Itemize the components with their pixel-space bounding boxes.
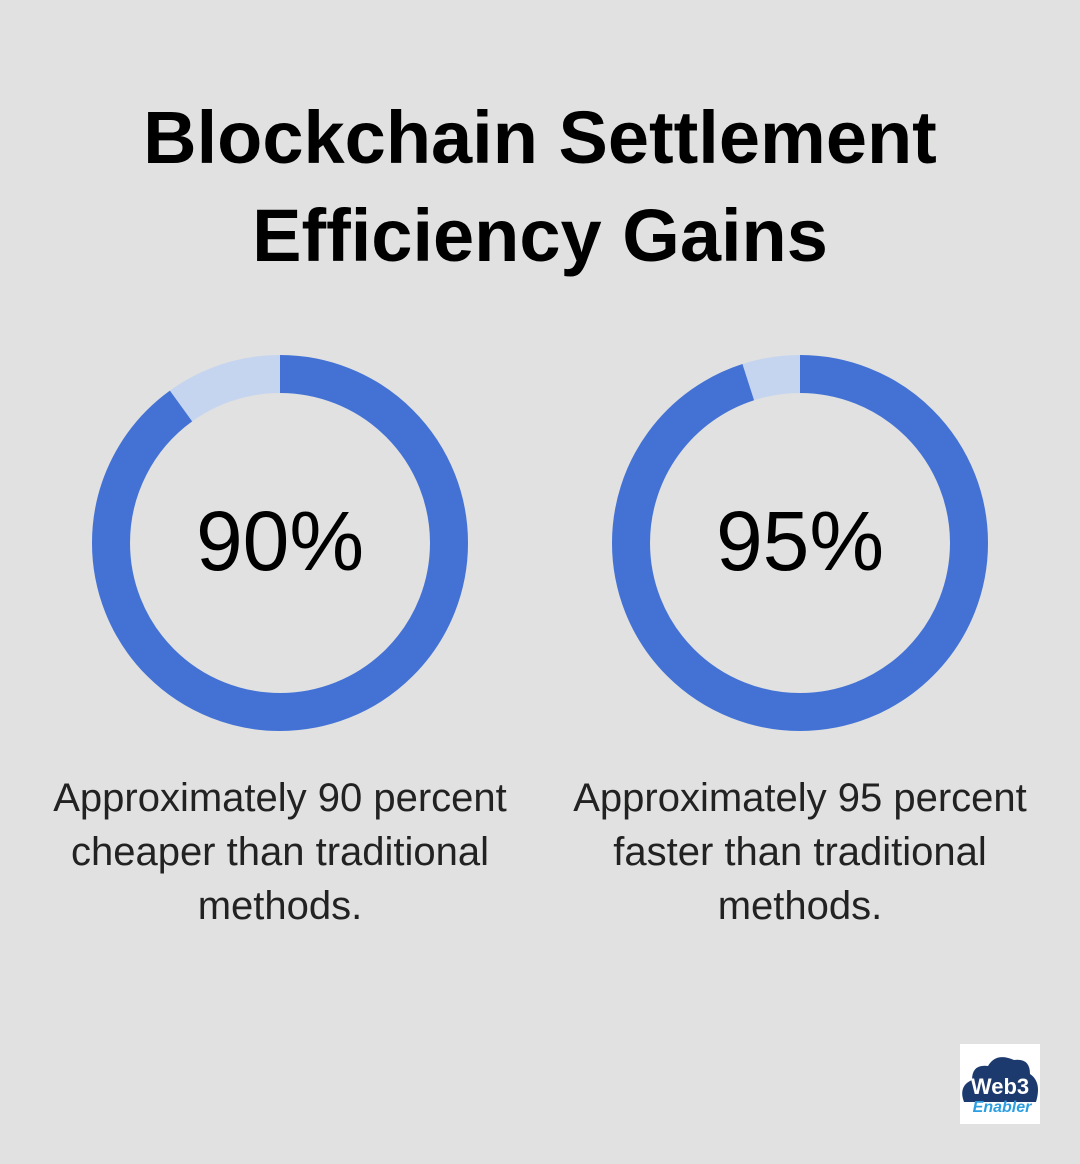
description left: Approximately 90 percent cheaper than traditional methods. (53, 776, 507, 928)
title: Efficiency Gains (252, 194, 828, 277)
title: Blockchain Settlement (143, 96, 937, 179)
donut: 90%: 90% (196, 494, 364, 588)
logo: Enabler (973, 1099, 1032, 1116)
donut charts (92, 355, 988, 731)
donut: 90% (111, 374, 449, 712)
logo: Web3 (971, 1074, 1029, 1099)
donut: 95%: 95% (716, 494, 884, 588)
description right: Approximately 95 percent faster than traditional methods. (573, 776, 1027, 928)
donut: 95% (631, 374, 969, 712)
title (143, 96, 937, 277)
logo (960, 1044, 1040, 1124)
